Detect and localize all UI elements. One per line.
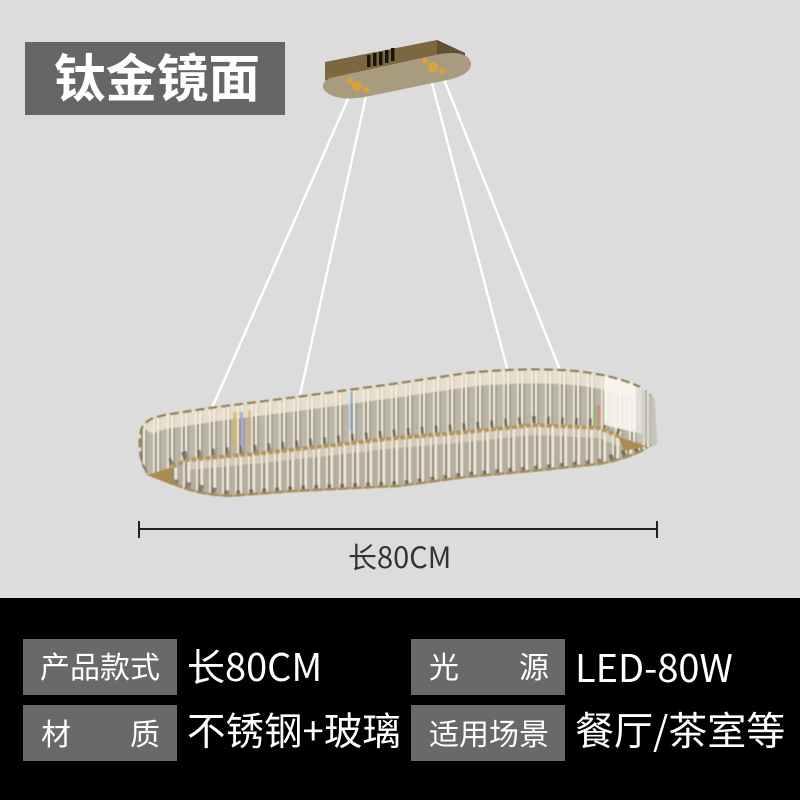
spec: style: 产品款式 [40, 643, 160, 687]
spec: usage: 餐厅/茶室等 [575, 701, 785, 757]
suspension wires [212, 68, 560, 408]
spec: material: 材 [41, 710, 71, 754]
chandelier crystal ring [135, 365, 660, 505]
upper crystal strip [135, 365, 660, 480]
spec: style: 长80CM [187, 637, 322, 692]
spec: style [23, 637, 322, 695]
dimension line [139, 521, 657, 538]
spec: light source [411, 638, 733, 695]
dimension label: 长80CM [348, 535, 451, 577]
lower crystal strip [148, 425, 650, 498]
spec: light source: 光 [429, 643, 459, 687]
spec: usage [411, 701, 785, 761]
icon: ceiling canopy [323, 40, 471, 98]
spec: light source: 源 [519, 643, 549, 687]
gold beaded rims [140, 369, 640, 472]
title badge: 钛金镜面 [54, 37, 260, 112]
spec: light source: LED-80W [575, 638, 733, 693]
spec: material [23, 701, 401, 761]
spec panel [0, 598, 800, 800]
spec: material: 质 [130, 710, 160, 754]
spec: usage: 适用场景 [429, 710, 549, 754]
gold inner wedges [147, 467, 172, 485]
spec: material: 不锈钢+玻璃 [187, 701, 401, 757]
background [0, 0, 800, 598]
